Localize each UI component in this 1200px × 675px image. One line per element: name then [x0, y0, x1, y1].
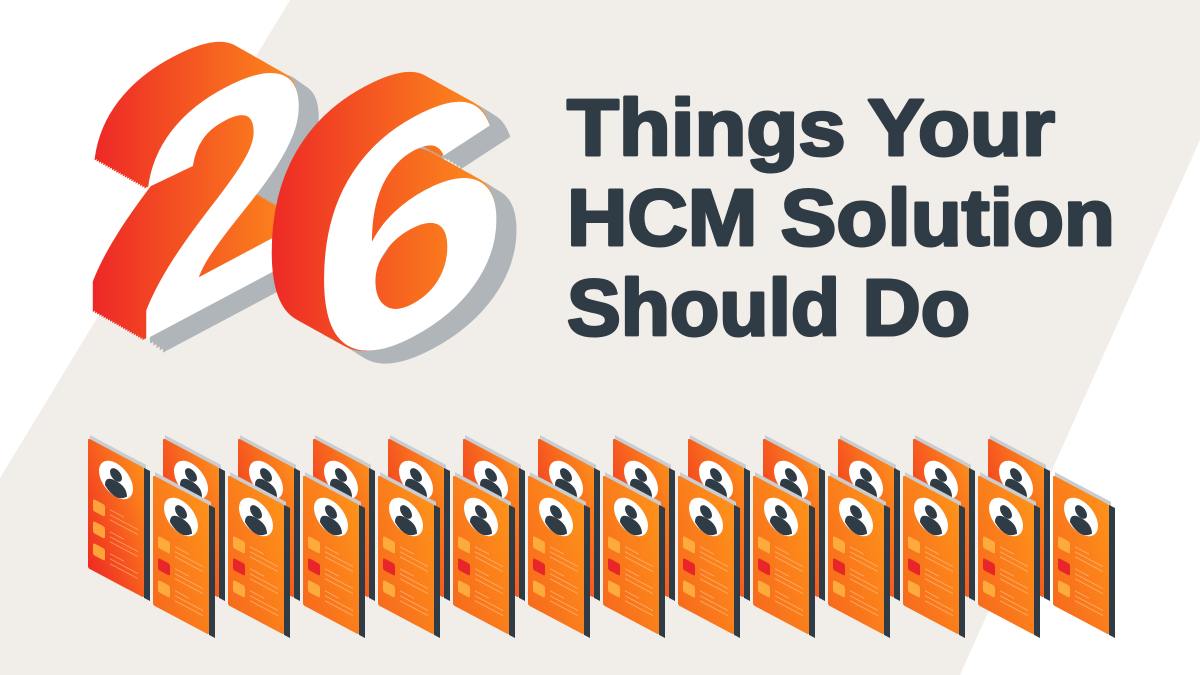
digit 6: 6 [290, 0, 489, 443]
digit 6: 6 [297, 0, 495, 447]
title: Things Your [567, 83, 1055, 172]
digit 2: 2 [153, 0, 334, 421]
digit 6: 6 [311, 3, 509, 454]
digit 6: 6 [286, 0, 484, 440]
digit 6: 6 [302, 0, 500, 449]
digit 2 [83, 0, 334, 458]
digit 6: 6 [316, 5, 514, 457]
digit 6: 6 [283, 0, 482, 439]
digit 6: 6 [309, 1, 507, 453]
digit 6: 6 [306, 0, 505, 452]
title: HCM Solution [567, 173, 1115, 262]
digit 6: 6 [326, 12, 524, 463]
digit 6: 6 [293, 0, 491, 444]
number 26 [83, 0, 528, 502]
digit 6: 6 [295, 0, 493, 445]
digit 2: 2 [150, 0, 330, 418]
digit 6: 6 [300, 0, 498, 448]
digit 6 [260, 0, 528, 502]
digit 6: 6 [329, 14, 528, 466]
cards: front row [153, 471, 1115, 638]
cards: back row [88, 434, 1050, 601]
digit 6: 6 [322, 10, 521, 461]
digit 6: 6 [304, 0, 502, 450]
digit 6: 6 [319, 7, 517, 459]
digit 6: 6 [288, 0, 486, 442]
title: Should Do [567, 263, 970, 352]
title [567, 83, 1115, 352]
